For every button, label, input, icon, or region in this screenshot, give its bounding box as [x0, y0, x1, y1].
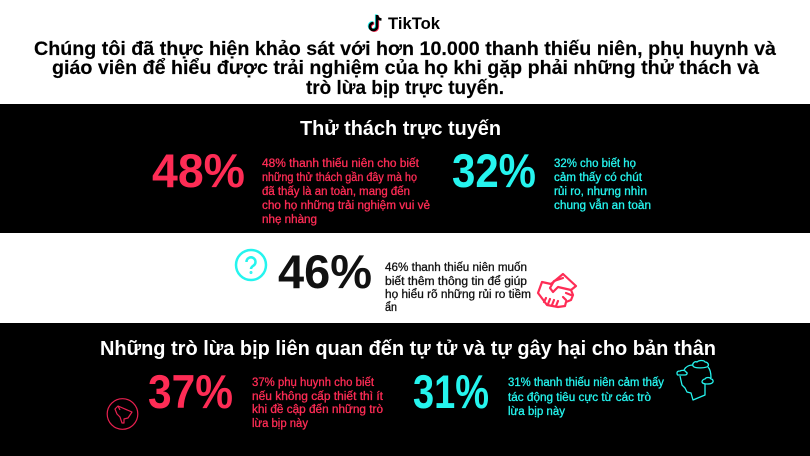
text block: 48% description: nhẹ nhàng [262, 214, 317, 226]
stat: 37%: 37% [148, 365, 233, 418]
main heading: trò lừa bịp trực tuyến. [306, 77, 504, 99]
text block: 31% description: tác động tiêu cực từ các trò [508, 392, 651, 404]
icon: handshake [538, 274, 576, 307]
text block: 31% description [508, 377, 664, 418]
section heading: hoaxes: Những trò lừa bịp liên quan đến tự tử và tự gây hại cho bản thân [100, 338, 716, 360]
text block: 46% description: biết thêm thông tin để giúp [385, 276, 527, 288]
text block: 31% description: lừa bịp này [508, 406, 565, 418]
text block: 46% description: ẩn [385, 302, 397, 314]
text block: 48% description: đã thấy là an toàn, mang đến [262, 186, 410, 198]
text block: 32% description: chung vẫn an toàn [554, 199, 651, 212]
text block: 32% description: rủi ro, nhưng nhìn [554, 186, 647, 198]
stat: 31%: 31% [413, 365, 489, 418]
main heading [34, 38, 776, 99]
logo: TikTok: TikTok [388, 14, 441, 33]
icon: question mark [236, 250, 266, 280]
text block: 46% description: 46% thanh thiếu niên muốn [385, 262, 527, 274]
panel: wants more information [0, 233, 810, 323]
stat: 48%: 48% [152, 144, 245, 197]
panel: online challenges [0, 104, 810, 233]
panel: hoaxes about suicide and self-harm [0, 323, 810, 456]
text block: 32% description [554, 158, 651, 212]
text block: 48% description: những thử thách gần đây mà họ [262, 172, 417, 184]
stat: 32%: 32% [452, 144, 536, 197]
text block: 37% description: lừa bịp này [252, 418, 308, 430]
text block: 48% description: cho họ những trải nghiệm vui vẻ [262, 200, 430, 212]
text block: 48% description [262, 158, 430, 226]
stat: 46%: 46% [278, 245, 372, 298]
text block: 48% description: 48% thanh thiếu niên cho biết [262, 158, 420, 170]
text block: 32% description: cảm thấy có chút [554, 172, 643, 184]
text block: 37% description [252, 377, 384, 430]
text block: 32% description: 32% cho biết họ [554, 158, 636, 170]
icon: head with clouds [677, 360, 713, 400]
main heading: Chúng tôi đã thực hiện khảo sát với hơn 10.000 thanh thiếu niên, phụ huynh và [34, 38, 776, 60]
text block: 46% description [385, 262, 531, 314]
icon: thumbs down [107, 399, 138, 429]
text block: 31% description: 31% thanh thiếu niên cảm thấy [508, 377, 664, 389]
text block: 46% description: họ hiểu rõ những rủi ro tiềm [385, 289, 531, 301]
text block: 37% description: khi đề cập đến những trò [252, 404, 383, 416]
section heading: online challenges: Thử thách trực tuyến [300, 118, 501, 140]
text block: 37% description: 37% phụ huynh cho biết [252, 377, 375, 389]
text block: 37% description: nếu không cấp thiết thì ít [252, 391, 384, 403]
main heading: giáo viên để hiểu được trải nghiệm của họ khi gặp phải những thử thách và [52, 57, 759, 79]
